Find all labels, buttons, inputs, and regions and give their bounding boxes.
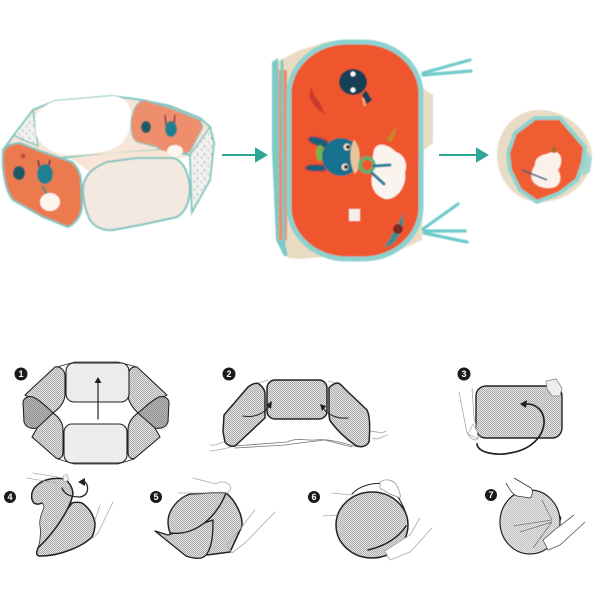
- bird character: [339, 69, 372, 106]
- step number 2: [222, 368, 236, 380]
- right curved arrow: [323, 408, 348, 418]
- cloud on pouch: [531, 152, 561, 188]
- upper lobe: [32, 478, 73, 548]
- curved arrow: [477, 404, 544, 454]
- step number 1: 1: [18, 369, 24, 379]
- characters on right panel: [141, 115, 183, 157]
- left front red panel: [3, 143, 82, 227]
- back rim: [3, 96, 214, 212]
- rabbit character: [305, 137, 360, 176]
- hands and arms: [27, 473, 113, 538]
- top hand: [380, 480, 400, 498]
- step number 2: 2: [226, 369, 232, 379]
- step number 7: 7: [488, 490, 494, 500]
- bottom bird: [384, 213, 403, 248]
- left teal strip: [272, 58, 288, 256]
- characters on left panel: [13, 154, 60, 211]
- cloud with scarf: [360, 126, 406, 199]
- back layers: [276, 41, 433, 259]
- step number 6: 6: [311, 492, 317, 502]
- photo: open ball pen: [3, 96, 214, 230]
- right mesh side: [190, 127, 214, 212]
- left curved arrow: [243, 405, 270, 417]
- right back red panel: [131, 100, 203, 157]
- right hand: [546, 379, 562, 396]
- arrow: open to flat: [222, 149, 266, 161]
- step number 5: 5: [153, 492, 159, 502]
- step 1 diagram: [14, 362, 169, 464]
- arrow: flat to ball: [439, 149, 487, 161]
- step 6 diagram: [308, 480, 432, 560]
- front floor: [70, 150, 190, 172]
- left mesh side: [14, 110, 38, 146]
- white tag: [349, 209, 360, 221]
- step number 4: 4: [7, 492, 13, 502]
- main orange panel: [289, 42, 421, 259]
- tabs: [423, 60, 471, 242]
- arrow up: [97, 380, 99, 419]
- step 7 diagram: [485, 478, 585, 554]
- fox character: [309, 87, 325, 115]
- back white panel: [35, 96, 131, 155]
- rotation arrow: [62, 481, 88, 497]
- right arm: [543, 515, 585, 550]
- lower lobe: [37, 502, 95, 556]
- step number 3: 3: [461, 369, 467, 379]
- step 2 diagram: [210, 368, 388, 451]
- left arm: [459, 388, 480, 440]
- step 4 diagram: [4, 473, 113, 556]
- photo: folded flat pen: [272, 41, 471, 259]
- top hand: [506, 478, 532, 498]
- photo: twisted round pouch: [497, 110, 592, 202]
- right arm: [385, 518, 432, 560]
- step 3 diagram: [458, 368, 562, 454]
- front white panel: [83, 158, 190, 230]
- step number 1: [14, 368, 28, 380]
- step 5 diagram: [150, 478, 275, 558]
